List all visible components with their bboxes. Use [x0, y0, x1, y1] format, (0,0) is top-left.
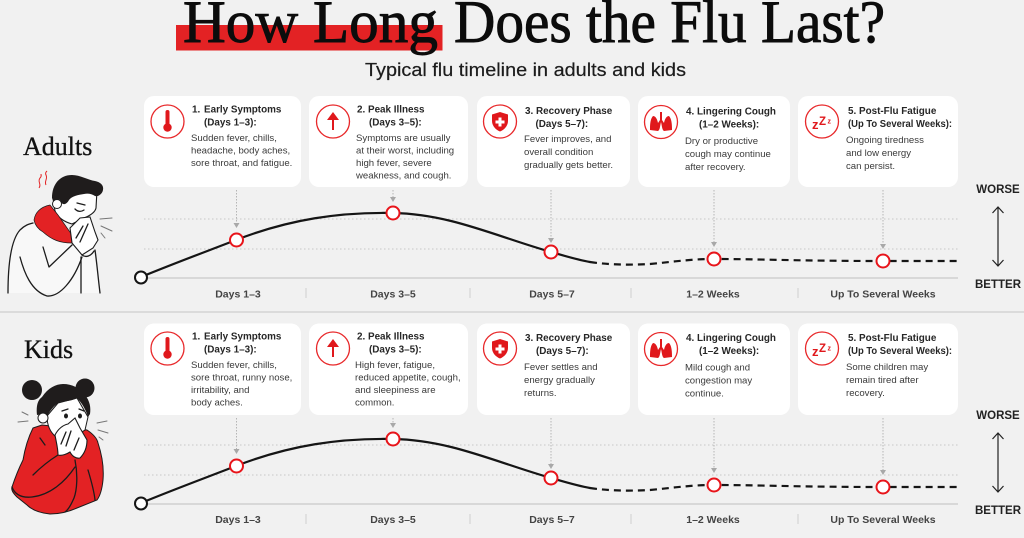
icon: sleep	[806, 105, 838, 138]
scale: worse to better, kids: BETTER	[975, 505, 1022, 517]
icon: sleep: Z	[819, 116, 826, 128]
card: kids post-flu fatigue	[798, 324, 958, 415]
card: kids peak illness: and sleepiness are	[355, 385, 436, 396]
card: adults early symptoms: Early Symptoms	[204, 104, 282, 116]
card: adults early symptoms: (Days 1–3):	[204, 118, 257, 128]
card: kids early symptoms: 1.	[192, 332, 200, 342]
chart: adults flu timeline: Days 1–3	[215, 288, 261, 300]
card: kids recovery phase: Fever settles and	[524, 362, 598, 373]
chart: adults flu timeline	[135, 190, 958, 300]
pointer arrows	[234, 190, 886, 249]
severity curve	[141, 213, 958, 277]
card: kids recovery phase	[477, 324, 630, 415]
card: kids peak illness: High fever, fatigue,	[355, 360, 435, 371]
chart: adults flu timeline: Up To Several Weeks	[830, 288, 936, 300]
card: adults peak illness: (Days 3–5):	[369, 118, 422, 128]
heading: Adults: Adults	[23, 132, 92, 161]
scale: worse to better, adults	[975, 184, 1022, 291]
icon: sleep: z	[828, 346, 832, 352]
icon: up arrow	[316, 105, 350, 138]
card: adults post-flu fatigue: 5. Post-Flu Fatigue	[848, 106, 937, 117]
chart: kids flu timeline	[135, 418, 958, 526]
card: adults post-flu fatigue	[798, 96, 958, 187]
chart: adults flu timeline: Days 5–7	[529, 288, 575, 300]
card: kids post-flu fatigue: 5. Post-Flu Fatigue	[848, 333, 937, 344]
icon: sleep: z	[828, 118, 832, 126]
pointer arrows	[234, 418, 886, 475]
card: kids post-flu fatigue: recovery.	[846, 388, 885, 399]
card: kids peak illness: common.	[355, 398, 394, 408]
card: adults lingering cough: 4. Lingering Cough	[686, 106, 776, 118]
card: adults peak illness	[309, 96, 468, 187]
card: adults post-flu fatigue: (Up To Several Weeks):	[848, 119, 952, 130]
icon: thermometer	[151, 332, 184, 365]
card: kids early symptoms	[144, 324, 301, 415]
card: adults post-flu fatigue: can persist.	[846, 161, 895, 172]
card: kids post-flu fatigue: Some children may	[846, 362, 928, 373]
card: adults early symptoms: sore throat, and fatigue.	[191, 158, 292, 169]
chart: kids flu timeline: Up To Several Weeks	[830, 514, 936, 526]
card: kids lingering cough	[638, 324, 790, 415]
chart: kids flu timeline: Days 5–7	[529, 514, 575, 526]
card: adults peak illness: weakness, and cough.	[355, 170, 451, 182]
card: kids early symptoms: irritability, and	[191, 385, 249, 396]
chart: kids flu timeline: Days 3–5	[370, 514, 416, 526]
icon: sleep: z	[812, 117, 819, 132]
card: adults recovery phase: gradually gets better.	[524, 160, 613, 171]
card: kids early symptoms: sore throat, runny nose,	[191, 372, 292, 384]
card: adults lingering cough: Dry or productive	[685, 136, 758, 147]
icon: sleep: z	[812, 344, 819, 359]
card: adults lingering cough: cough may continue	[685, 149, 771, 160]
card: kids lingering cough: 4. Lingering Cough	[686, 333, 776, 344]
card: kids lingering cough: Mild cough and	[685, 362, 750, 374]
card: adults recovery phase	[477, 96, 630, 187]
icon: lungs	[644, 332, 678, 366]
icon: lungs	[644, 106, 678, 138]
card: adults post-flu fatigue: and low energy	[846, 148, 911, 159]
icon: sleep	[806, 332, 838, 365]
card: kids post-flu fatigue: remain tired after	[846, 375, 919, 386]
card: kids lingering cough: congestion may	[685, 376, 752, 386]
scale: worse to better, adults: WORSE	[976, 184, 1020, 196]
icon: shield	[484, 105, 516, 138]
card: adults early symptoms	[144, 96, 301, 187]
card: kids lingering cough: continue.	[685, 388, 724, 400]
card: adults peak illness: high fever, severe	[356, 158, 432, 169]
card: kids early symptoms: Sudden fever, chills,	[191, 360, 277, 371]
card: adults early symptoms: Sudden fever, chills,	[191, 133, 277, 144]
card: adults peak illness: 2. Peak Illness	[357, 104, 425, 116]
icon: thermometer	[151, 105, 184, 138]
chart: kids flu timeline: Days 1–3	[215, 514, 261, 526]
card: kids recovery phase: returns.	[524, 388, 557, 399]
card: adults lingering cough: (1–2 Weeks):	[699, 120, 759, 130]
icon: shield	[484, 332, 516, 365]
card: kids lingering cough: (1–2 Weeks):	[699, 346, 759, 357]
card: kids early symptoms: Early Symptoms	[204, 332, 282, 342]
card: adults lingering cough: after recovery.	[685, 162, 746, 173]
card: adults recovery phase: overall condition	[524, 147, 593, 158]
icon: up arrow	[316, 332, 350, 365]
chart: adults flu timeline: 1–2 Weeks	[686, 288, 740, 300]
card: kids recovery phase: energy gradually	[524, 375, 595, 386]
card: kids recovery phase: (Days 5–7):	[536, 346, 589, 357]
card: kids post-flu fatigue: (Up To Several Weeks):	[848, 346, 952, 357]
card: kids peak illness: (Days 3–5):	[369, 344, 422, 356]
chart: adults flu timeline: Days 3–5	[370, 288, 416, 300]
subtitle: Typical flu timeline in adults and kids	[365, 59, 686, 80]
card: kids peak illness: reduced appetite, cough,	[355, 372, 461, 384]
card: adults post-flu fatigue: Ongoing tiredness	[846, 135, 924, 146]
card: adults lingering cough	[638, 96, 790, 187]
severity curve	[141, 439, 958, 503]
title	[176, 0, 885, 56]
card: adults recovery phase: Fever improves, and	[524, 134, 611, 145]
icon: sleep: Z	[819, 343, 826, 355]
illustration: child sneezing in red blanket	[12, 378, 108, 514]
scale: worse to better, kids	[975, 410, 1022, 517]
card: kids peak illness	[309, 324, 468, 415]
card: adults peak illness: at their worst, including	[356, 146, 454, 156]
card: kids early symptoms: (Days 1–3):	[204, 344, 257, 356]
card: adults early symptoms: 1.	[192, 104, 200, 116]
card: kids recovery phase: 3. Recovery Phase	[525, 333, 613, 344]
card: adults peak illness: Symptoms are usually	[356, 133, 451, 144]
chart: kids flu timeline: 1–2 Weeks	[686, 514, 740, 526]
card: kids peak illness: 2. Peak Illness	[357, 332, 425, 342]
illustration: adult sneezing	[8, 171, 112, 296]
card: adults early symptoms: headache, body aches,	[191, 146, 290, 156]
card: adults recovery phase: 3. Recovery Phase	[525, 106, 613, 117]
scale: worse to better, adults: BETTER	[975, 279, 1022, 291]
scale: worse to better, kids: WORSE	[976, 410, 1020, 422]
card: kids early symptoms: body aches.	[191, 398, 243, 408]
card: adults recovery phase: (Days 5–7):	[536, 119, 588, 130]
heading: Kids: Kids	[24, 335, 73, 364]
